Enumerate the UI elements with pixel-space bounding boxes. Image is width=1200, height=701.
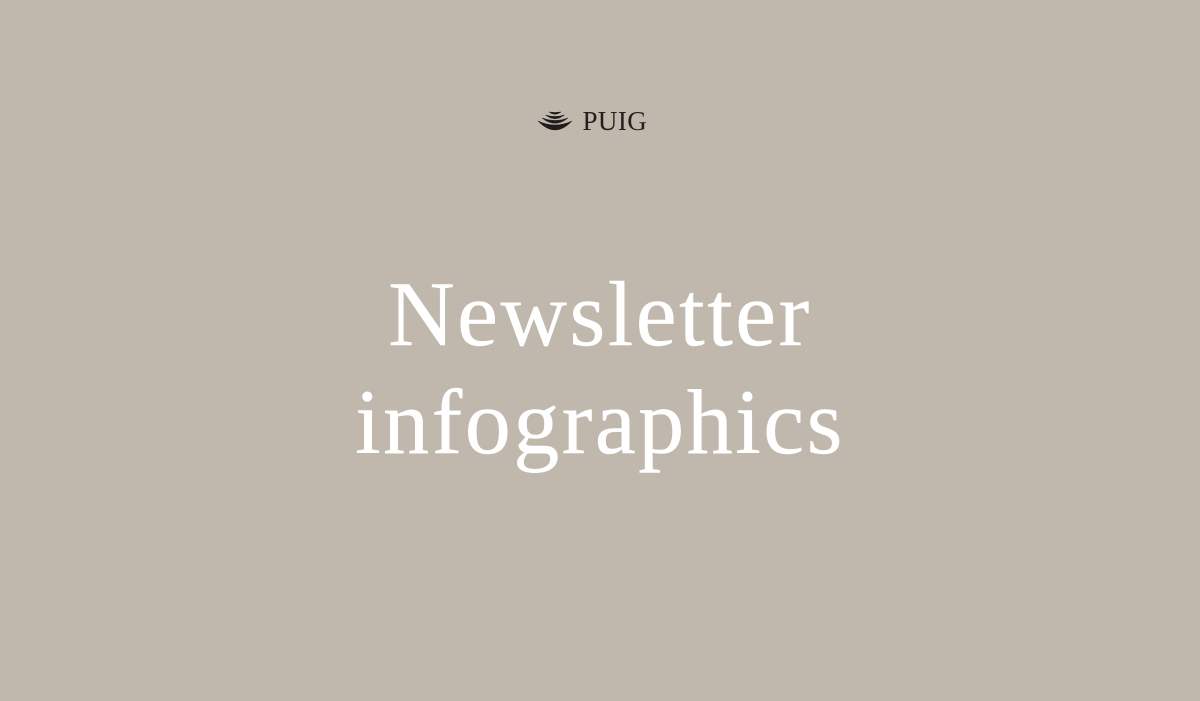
logo: Puig [538,106,647,136]
logo wordmark: PUIG [582,106,647,136]
icon: Puig waves [538,112,572,130]
title line 1: Newsletter [388,263,812,365]
title line 2: infographics [355,371,845,473]
